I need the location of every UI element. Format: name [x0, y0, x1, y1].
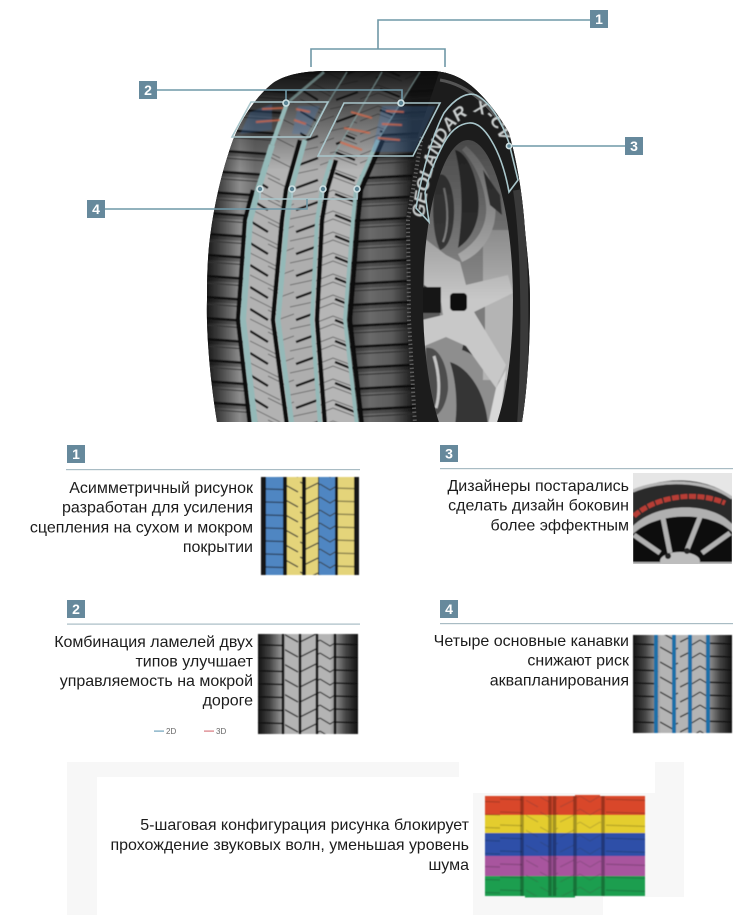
callout 3: sidewall outline [416, 94, 625, 222]
badge 1: 1 [595, 11, 603, 27]
panel 3 badge [440, 445, 458, 462]
tire illustration [206, 71, 530, 422]
wheel [423, 140, 513, 422]
tire illustration: GEOLANDAR X-CV [412, 100, 510, 218]
dark grooves [238, 140, 383, 425]
panel 2 badge: 2 [72, 601, 80, 617]
tire left shoulder [206, 72, 314, 422]
callout 4: groove bracket [105, 186, 360, 209]
panel 4 badge: 4 [445, 601, 453, 617]
panel 4 text: аквапланирования [490, 672, 629, 689]
callout 1: tread bracket [311, 20, 591, 67]
sidewall [406, 70, 531, 425]
panel 5: noise text: шума [428, 857, 469, 874]
sidewall lettering [424, 113, 512, 220]
badge 2 [139, 81, 157, 99]
panel 3 text: Дизайнеры постарались [447, 478, 629, 495]
panel 3 text: сделать дизайн боковин [448, 498, 629, 515]
panel 1 text: разработан для усиления [62, 500, 253, 517]
tire center ribs [243, 72, 420, 425]
top shading [228, 71, 512, 164]
panel 2 image: tread [258, 634, 358, 734]
panel 1 badge [67, 445, 85, 463]
callout 2: sipe zones [157, 90, 440, 156]
panel 2 text: управляемость на мокрой [60, 673, 253, 690]
panel 1 text: сцепления на сухом и мокром [30, 519, 253, 536]
panel 1 text: Асимметричный рисунок [69, 480, 254, 497]
panel 2 text: Комбинация ламелей двух [54, 634, 253, 651]
panel 4 text: снижают риск [527, 653, 630, 670]
panel 4 badge [440, 600, 458, 618]
tire right shoulder [345, 72, 450, 425]
badge 4: 4 [92, 201, 100, 217]
panel 2 legend: 2D [166, 727, 176, 736]
panel 5: noise text: прохождение звуковых волн, уменьшая уровень [110, 837, 469, 854]
panel 2 legend: 3D [216, 727, 226, 736]
wheel pockets [420, 146, 502, 425]
panel 1 image: coloured tread [261, 477, 359, 575]
panel 4 image: tread with blue grooves [633, 635, 732, 733]
panel 2 text: дороге [203, 692, 253, 710]
panel 4 text: Четыре основные канавки [434, 633, 629, 650]
badge 4 [87, 200, 105, 218]
panel 5: noise text: 5-шаговая конфигурация рисунка блокирует [140, 817, 470, 834]
light blue groove stripes [243, 72, 420, 425]
background frame: noise block [67, 762, 684, 915]
panel 4: grooves [434, 600, 733, 733]
badge 1 [590, 10, 608, 28]
panel 3 image: wheel [633, 473, 732, 570]
red and blue sipe highlights [240, 104, 436, 152]
panel 2 legend [154, 727, 226, 736]
badge 3: 3 [630, 138, 638, 154]
panel 1 text: покрытии [183, 539, 253, 556]
panel 2: sipes [54, 600, 360, 736]
panel 1 badge: 1 [72, 446, 80, 462]
panel 2 badge [67, 600, 85, 618]
badge 3 [625, 137, 643, 155]
panel 1: asymmetric pattern [30, 445, 360, 575]
badge 2: 2 [144, 82, 152, 98]
panel 5 image: rainbow tread [485, 795, 645, 898]
wheel spokes [422, 238, 513, 388]
panel 3: sidewall [440, 445, 733, 570]
panel 3 badge: 3 [445, 446, 453, 462]
panel 3 text: более эффектным [490, 517, 629, 534]
panel 2 text: типов улучшает [135, 654, 254, 670]
